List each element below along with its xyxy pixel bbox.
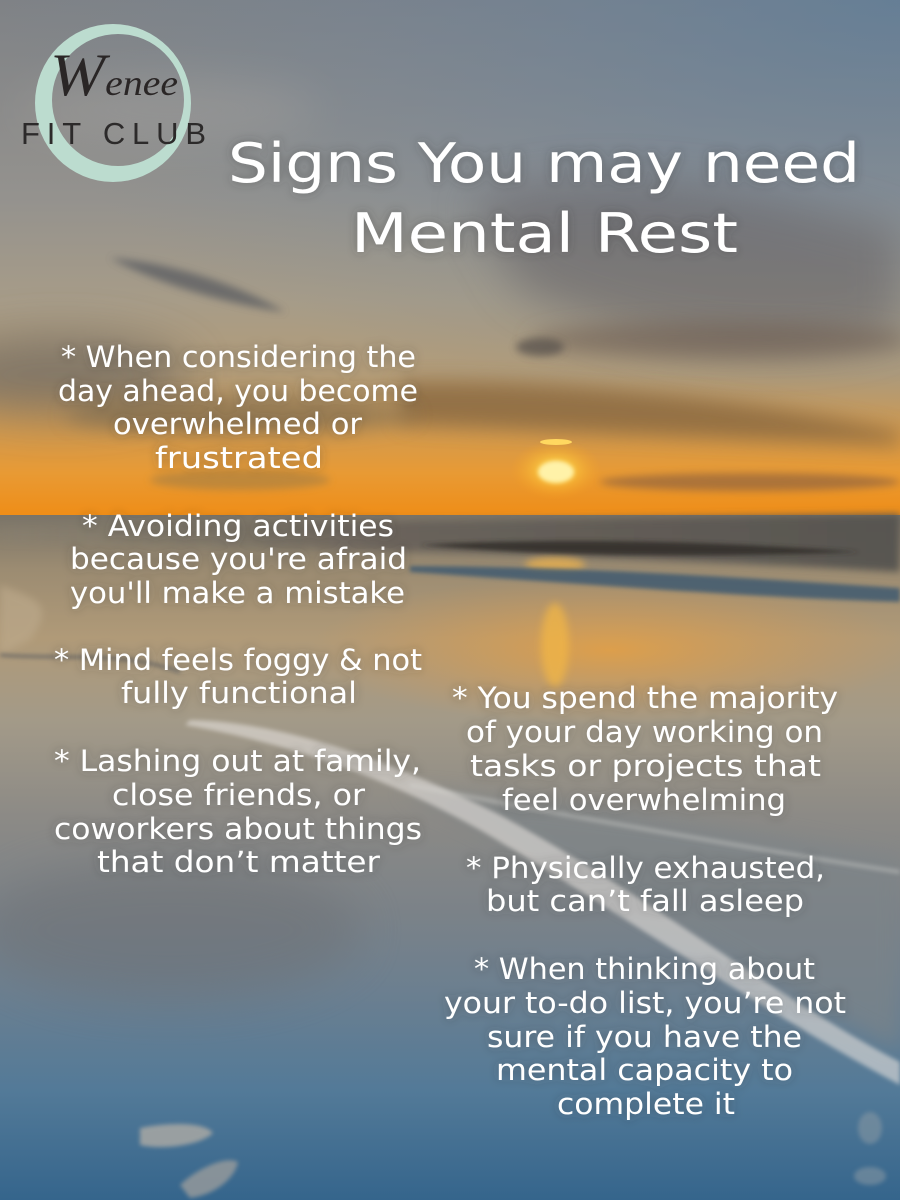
title: Mental Rest <box>351 202 738 265</box>
sign: overwhelmed by day ahead <box>58 340 418 475</box>
sign: avoiding activities: because you're afraid <box>70 542 407 576</box>
icon: mint brush ring <box>35 24 191 182</box>
sign: exhausted but awake: but can’t fall asleep <box>486 884 804 918</box>
sun <box>510 439 602 500</box>
sign: to-do list capacity: complete it <box>557 1087 735 1121</box>
sign: exhausted but awake: * Physically exhausted, <box>466 851 825 885</box>
sign: lashing out: that don’t matter <box>97 845 380 879</box>
sign: overwhelming tasks: * You spend the majority <box>452 681 838 715</box>
sign: avoiding activities: you'll make a mistake <box>70 576 405 610</box>
sign: lashing out <box>54 744 422 879</box>
title <box>228 132 860 265</box>
sign: lashing out: close friends, or <box>112 778 365 812</box>
sign: overwhelmed by day ahead: * When considering the <box>61 340 416 374</box>
sign: to-do list capacity: your to-do list, you’re not <box>444 986 846 1020</box>
logo: Wenee Fit Club <box>21 24 206 182</box>
right column: signs list <box>444 681 846 1121</box>
sign: avoiding activities: * Avoiding activities <box>82 509 394 543</box>
sign: to-do list capacity: * When thinking about <box>474 952 815 986</box>
sign: overwhelmed by day ahead: frustrated <box>155 441 323 475</box>
sign: to-do list capacity: mental capacity to <box>496 1053 793 1087</box>
background: sea and beach <box>0 514 900 1200</box>
sign: overwhelming tasks <box>452 681 838 817</box>
sign: overwhelmed by day ahead: overwhelmed or <box>113 407 362 441</box>
sign: to-do list capacity: sure if you have the <box>487 1020 802 1054</box>
sign: overwhelming tasks: tasks or projects that <box>470 749 821 783</box>
sign: overwhelming tasks: of your day working on <box>466 715 823 749</box>
sign: foggy mind <box>54 643 422 710</box>
sign: lashing out: * Lashing out at family, <box>54 744 421 778</box>
logo script: Wenee: Wenee <box>50 42 178 108</box>
left column: signs list <box>54 340 422 879</box>
sign: foggy mind: fully functional <box>121 676 357 710</box>
sign: exhausted but awake <box>466 851 825 918</box>
logo text: FIT CLUB: FIT CLUB <box>21 116 206 151</box>
sign: overwhelming tasks: feel overwhelming <box>502 783 786 817</box>
sign: to-do list capacity <box>444 952 846 1121</box>
title: Signs You may need <box>228 132 860 195</box>
background: sunset sky <box>0 0 900 530</box>
sign: avoiding activities <box>70 509 407 610</box>
sign: overwhelmed by day ahead: day ahead, you become <box>58 374 418 408</box>
sign: lashing out: coworkers about things <box>54 812 422 846</box>
sign: foggy mind: * Mind feels foggy & not <box>54 643 422 677</box>
